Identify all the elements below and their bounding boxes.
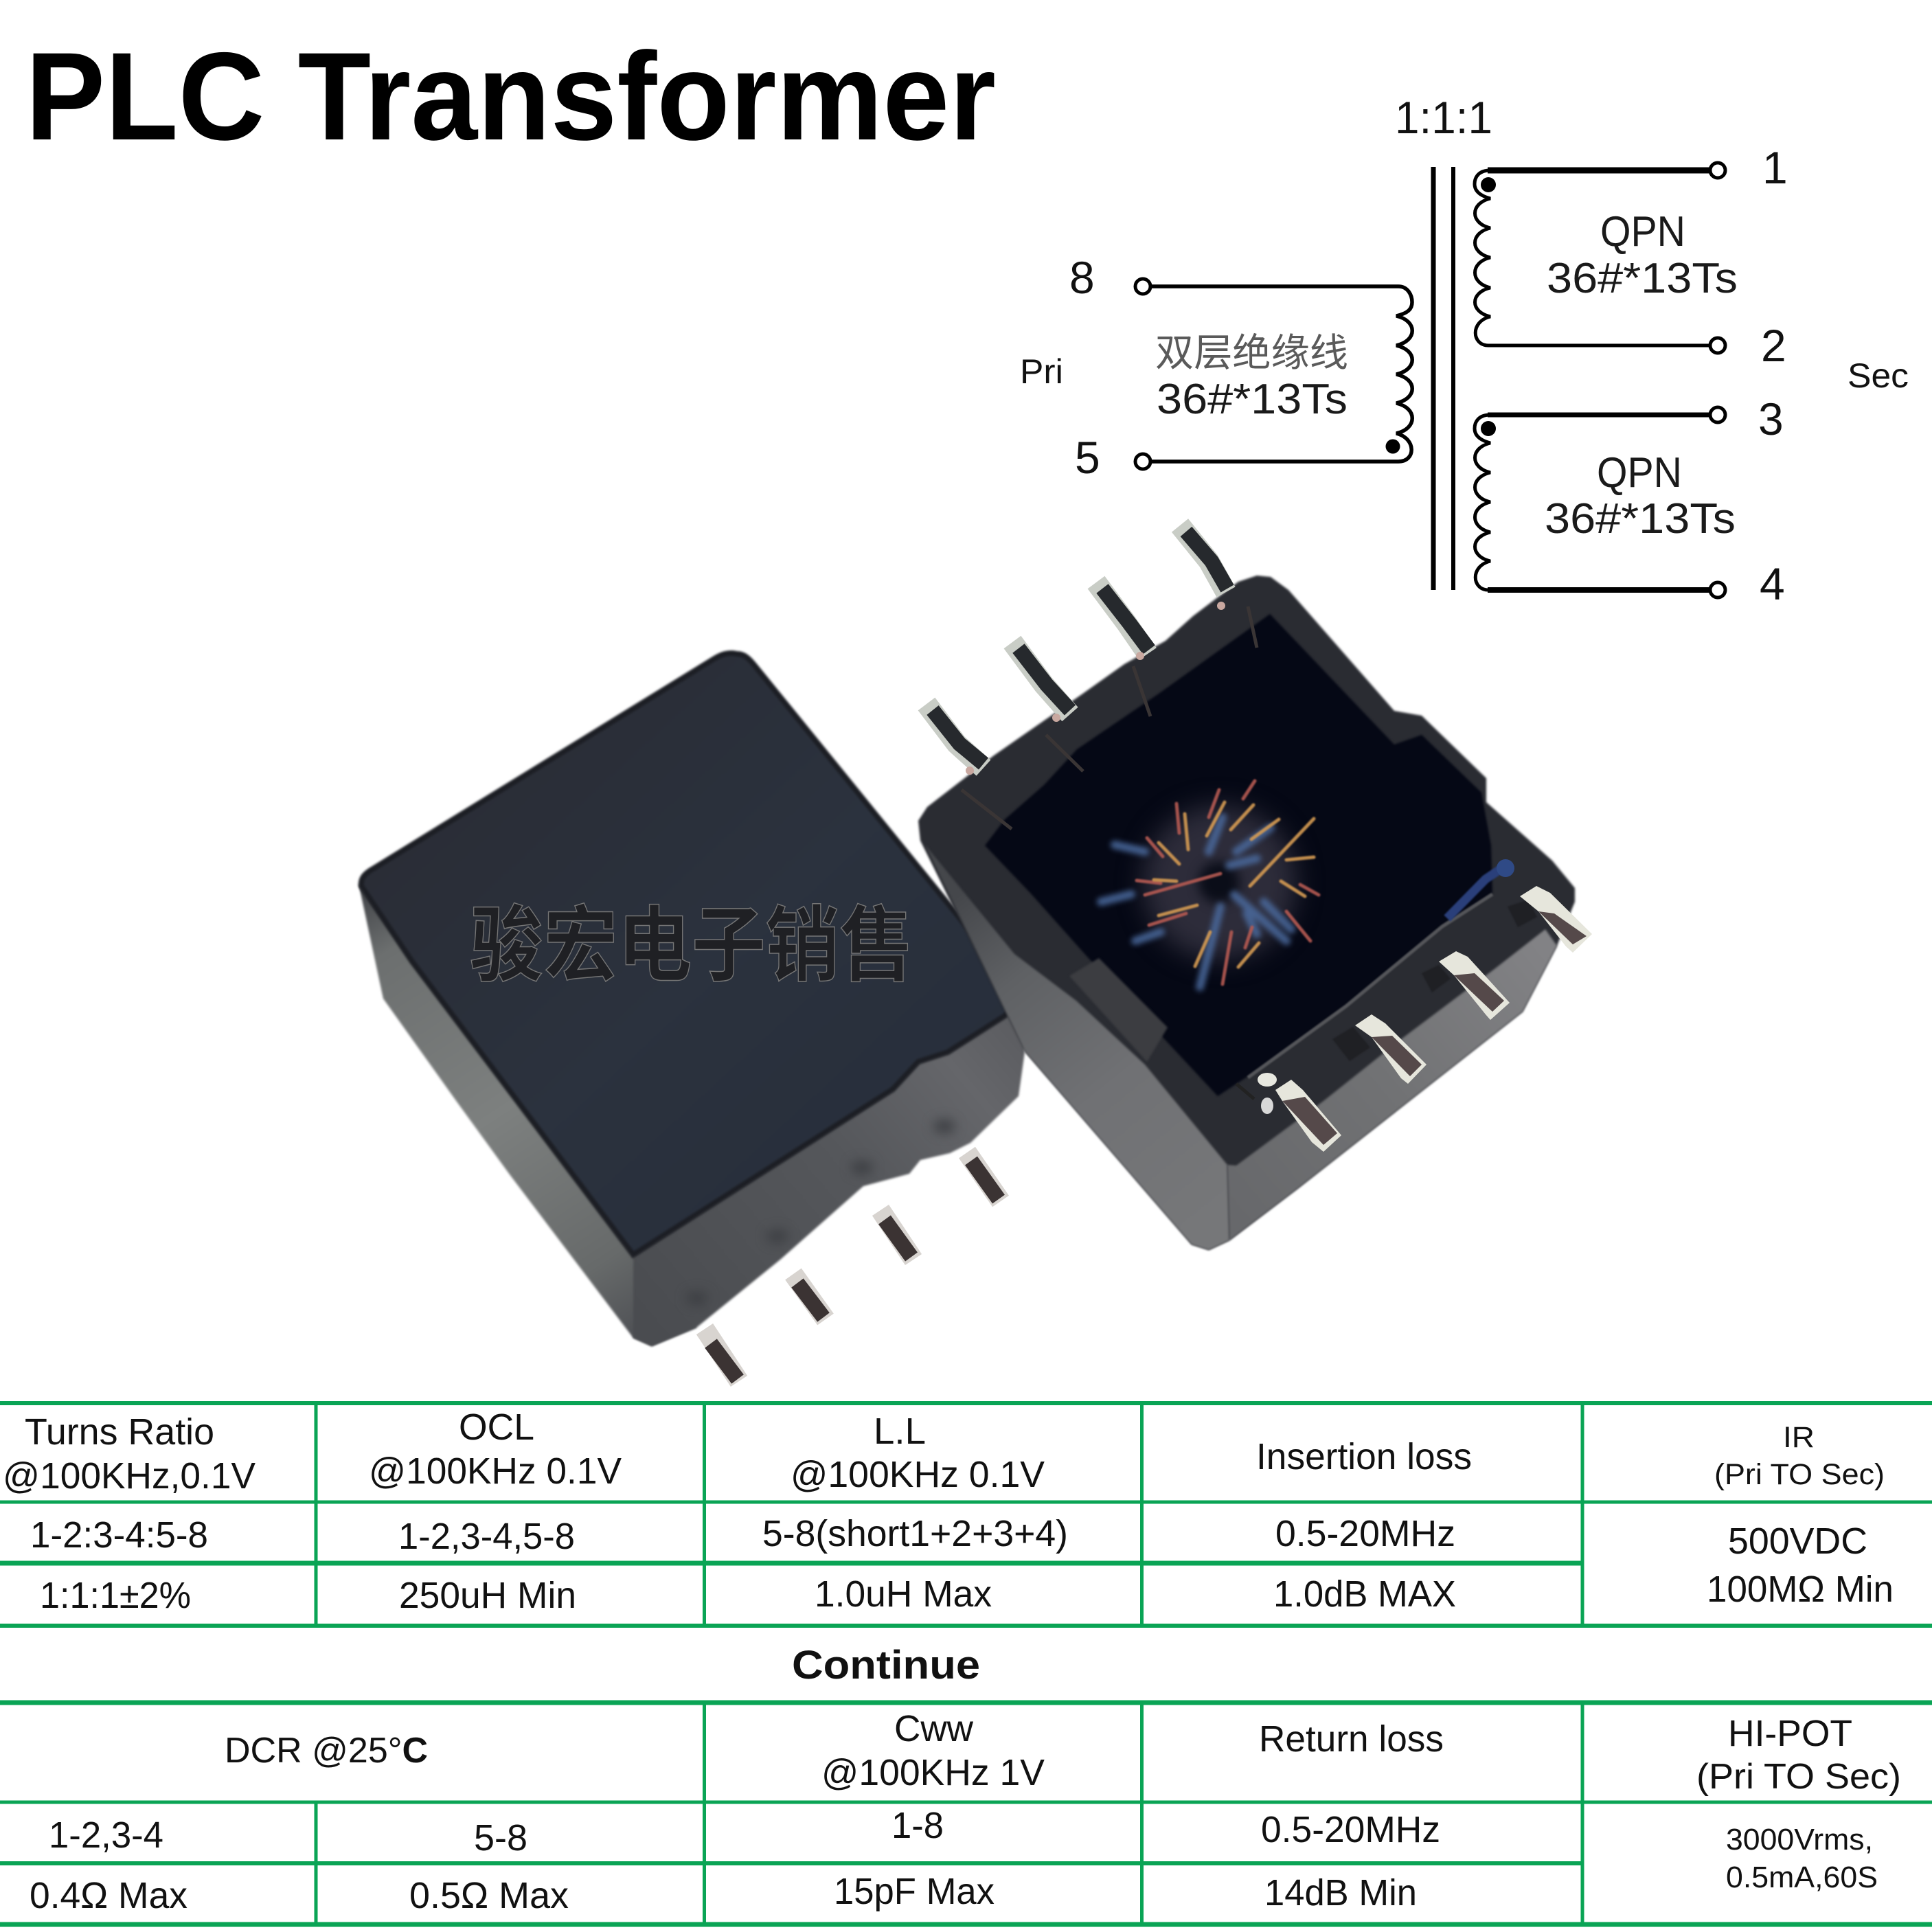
secondary winding 1-2 — [1475, 163, 1725, 353]
winding spec: secondary 3-4 — [1545, 449, 1736, 543]
body: left front side face — [925, 845, 1229, 1250]
body: right front side face — [1227, 929, 1557, 1240]
column: L.L — [762, 1411, 1068, 1615]
pin numbers: 1 — [1762, 142, 1788, 193]
primary winding 8-5 — [1135, 279, 1412, 469]
column: IR: IR — [1783, 1421, 1815, 1454]
column: insertion loss: Insertion loss — [1256, 1436, 1472, 1477]
column: DCR: 5-8 — [474, 1817, 527, 1859]
title: PLC Transformer — [25, 26, 996, 166]
column: HI-POT: 3000Vrms, — [1726, 1823, 1873, 1856]
column: turns ratio: 1-2:3-4:5-8 — [30, 1514, 208, 1556]
photo: closed transformer component — [359, 653, 1025, 1381]
winding spec: primary: 双层绝缘线 — [1155, 331, 1348, 374]
column: Cww: 1-8 — [891, 1805, 944, 1846]
column: DCR: 0.5Ω Max — [409, 1875, 569, 1916]
specification table: upper section — [0, 1403, 1932, 1626]
column: HI-POT — [1696, 1713, 1901, 1894]
transformer core lines — [1433, 167, 1453, 590]
column: return loss: Return loss — [1259, 1718, 1444, 1760]
column: OCL: @100KHz 0.1V — [369, 1451, 622, 1492]
photo: open transformer component — [918, 525, 1592, 1250]
watermark text: 骏宏电子销售 — [470, 900, 913, 992]
column: turns ratio: Turns Ratio — [25, 1411, 214, 1453]
pin numbers: 8 — [1069, 252, 1095, 303]
column: DCR: 0.4Ω Max — [30, 1875, 187, 1916]
front row of pins — [1236, 859, 1592, 1152]
turns ratio label: 1:1:1 — [1395, 92, 1492, 143]
column: turns ratio — [3, 1411, 255, 1616]
column: DCR: DCR @25°C — [225, 1731, 428, 1771]
column: return loss: 0.5-20MHz — [1261, 1809, 1440, 1850]
pin numbers — [1069, 142, 1788, 609]
table grid lines — [0, 1403, 1932, 1626]
column: insertion loss: 0.5-20MHz — [1275, 1513, 1455, 1554]
winding spec: secondary 3-4: QPN — [1597, 449, 1682, 497]
body: top face — [361, 653, 1024, 1255]
column: HI-POT: (Pri TO Sec) — [1696, 1757, 1901, 1797]
bottom pins — [705, 1152, 1001, 1381]
pin numbers: 2 — [1761, 320, 1786, 371]
column: Cww: 15pF Max — [834, 1871, 995, 1912]
column: L.L: L.L — [874, 1411, 926, 1452]
winding spec: secondary 1-2: 36#*13Ts — [1547, 255, 1738, 302]
pin numbers: 5 — [1075, 432, 1100, 483]
column: OCL: 1-2,3-4,5-8 — [398, 1516, 575, 1557]
column: OCL: 250uH Min — [399, 1575, 576, 1616]
column: OCL: OCL — [459, 1407, 534, 1448]
rim block — [1069, 958, 1168, 1062]
toroid winding core — [1101, 781, 1319, 987]
column: DCR: 1-2,3-4 — [49, 1815, 163, 1856]
column: HI-POT: 0.5mA,60S — [1726, 1861, 1878, 1894]
column: Cww: Cww — [894, 1708, 974, 1749]
body: left side face — [359, 883, 696, 1346]
column: IR: (Pri TO Sec) — [1714, 1458, 1885, 1491]
body: outer silhouette and rim — [918, 576, 1575, 1250]
column: OCL — [369, 1407, 622, 1616]
column: turns ratio: @100KHz,0.1V — [3, 1455, 255, 1497]
column: Cww: @100KHz 1V — [821, 1752, 1045, 1793]
column: IR: 500VDC — [1728, 1521, 1867, 1562]
column: insertion loss: 1.0dB MAX — [1273, 1573, 1456, 1615]
body: front side face — [633, 996, 1025, 1346]
table grid lines — [0, 1703, 1932, 1924]
column: return loss: 14dB Min — [1264, 1872, 1417, 1913]
column: HI-POT: HI-POT — [1728, 1713, 1852, 1754]
column: L.L: 1.0uH Max — [815, 1573, 992, 1615]
column: L.L: 5-8(short1+2+3+4) — [762, 1513, 1068, 1554]
pin numbers: 3 — [1758, 394, 1784, 444]
secondary winding 3-4 — [1475, 407, 1725, 598]
column: Cww — [821, 1708, 1045, 1912]
column: insertion loss — [1256, 1436, 1472, 1615]
specification table: lower section — [0, 1703, 1932, 1924]
column: turns ratio: 1:1:1±2% — [40, 1575, 191, 1616]
column: IR — [1707, 1421, 1894, 1610]
winding spec: primary: 36#*13Ts — [1157, 376, 1348, 423]
winding spec: secondary 3-4: 36#*13Ts — [1545, 495, 1736, 543]
winding spec: secondary 1-2 — [1547, 208, 1738, 302]
winding spec: primary — [1155, 331, 1348, 423]
column: return loss — [1259, 1718, 1444, 1913]
secondary label: Sec — [1848, 356, 1909, 395]
continue heading: Continue — [792, 1643, 980, 1687]
primary label: Pri — [1020, 352, 1063, 391]
column: L.L: @100KHz 0.1V — [791, 1454, 1045, 1495]
rear row of pins — [927, 525, 1257, 829]
winding spec: secondary 1-2: QPN — [1600, 208, 1685, 255]
schematic diagram — [1020, 92, 1909, 609]
dark inner cavity — [985, 614, 1492, 1096]
column: IR: 100MΩ Min — [1707, 1569, 1894, 1610]
pin numbers: 4 — [1760, 558, 1785, 609]
column: DCR — [30, 1731, 569, 1916]
